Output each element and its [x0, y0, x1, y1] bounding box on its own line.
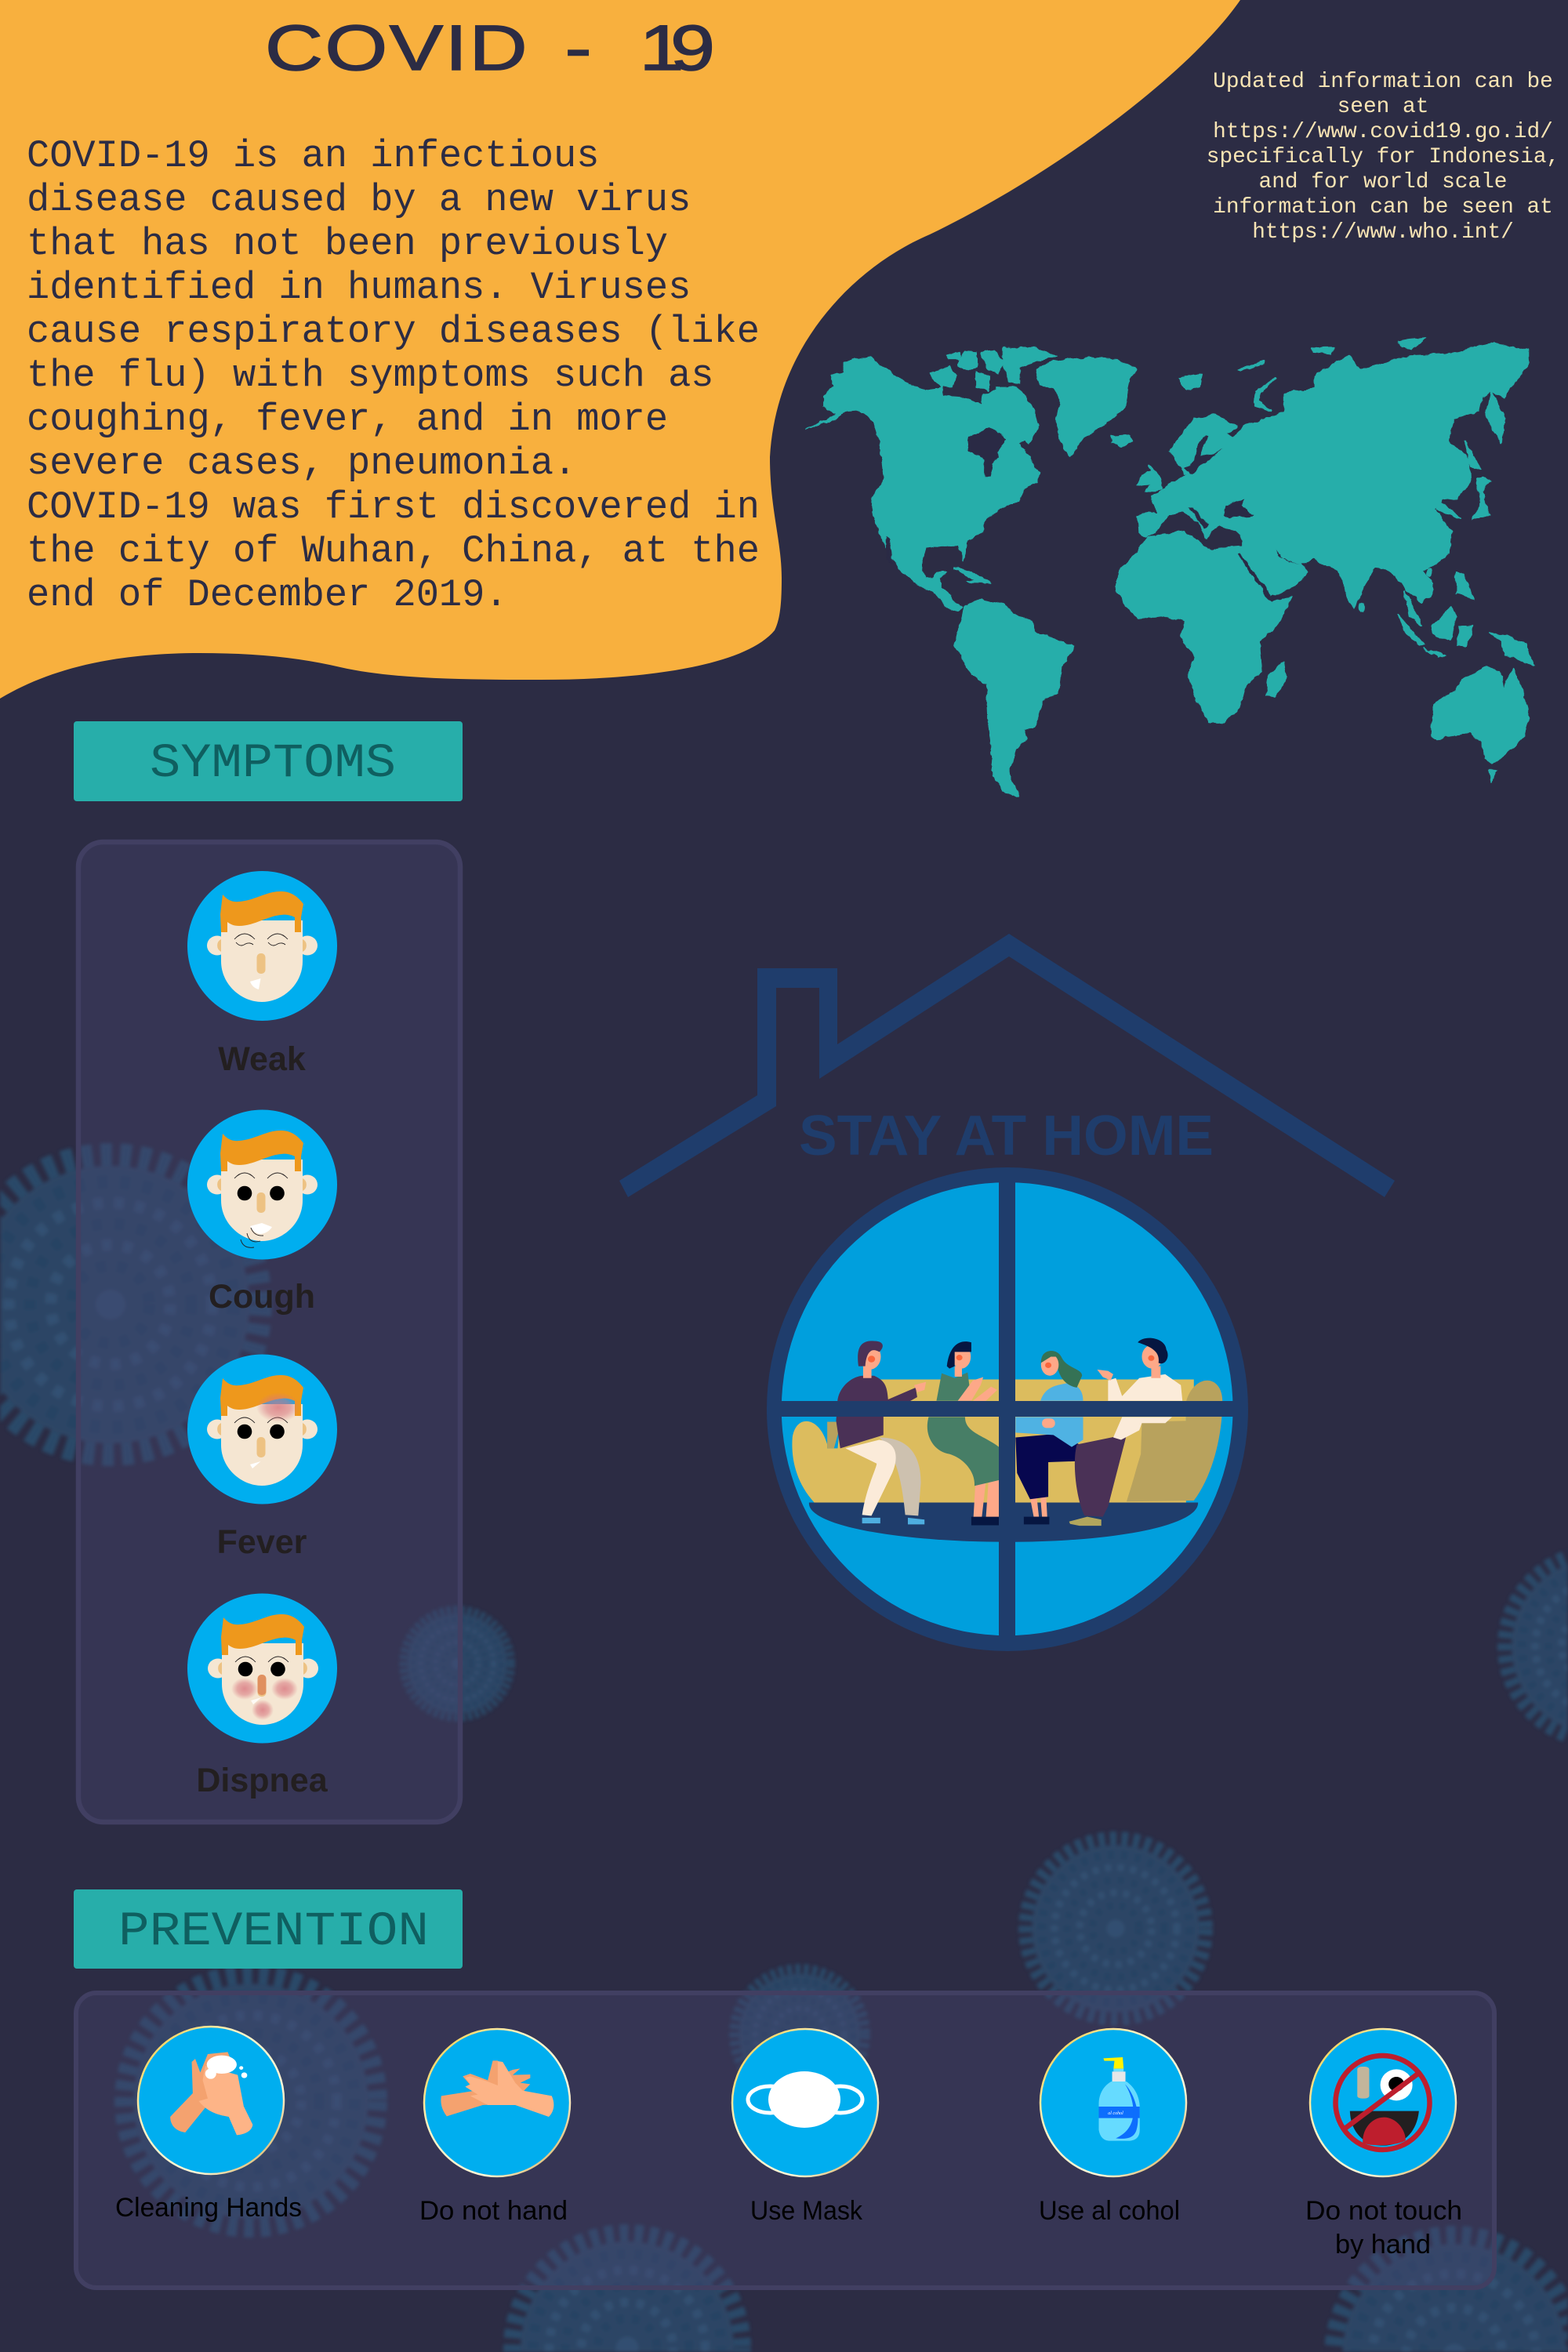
intro text block: COVID-19 was first discovered in — [27, 485, 760, 529]
panel: symptoms — [78, 842, 460, 1822]
stay at home heading: STAY AT HOME — [799, 1105, 1214, 1167]
person: woman in blue — [1015, 1351, 1083, 1524]
prevention: use alcohol: Use al cohol — [1039, 2196, 1180, 2226]
prevention: do not touch: by hand — [1335, 2230, 1431, 2259]
intro text block: the city of Wuhan, China, at the — [27, 529, 760, 573]
prevention: use alcohol: al cohol — [1108, 2111, 1123, 2116]
symptom: fever: Fever — [217, 1523, 307, 1561]
symptom: cough: Cough — [209, 1278, 315, 1316]
prevention: use alcohol — [1039, 2029, 1186, 2226]
world map — [807, 338, 1534, 797]
symptom: weak: Weak — [218, 1040, 306, 1078]
intro text block: that has not been previously — [27, 222, 668, 266]
person: woman in green dress — [927, 1341, 999, 1526]
window cross bars — [772, 1172, 1243, 1646]
panel: prevention — [76, 1993, 1494, 2288]
stay at home illustration — [619, 934, 1395, 1651]
updated information note: https://www.covid19.go.id/ — [1213, 120, 1553, 144]
prevention: do not hand — [419, 2029, 570, 2226]
intro text block: coughing, fever, and in more — [27, 397, 668, 441]
intro text block: identified in humans. Viruses — [27, 266, 691, 310]
intro text block: end of December 2019. — [27, 573, 508, 617]
intro text block: disease caused by a new virus — [27, 178, 691, 222]
title: COVID — [265, 12, 529, 84]
prevention: use mask — [732, 2029, 878, 2226]
symptoms heading — [74, 721, 463, 801]
updated information note: seen at — [1338, 95, 1428, 119]
window frame — [767, 1167, 1248, 1651]
symptom: dispnea — [187, 1593, 337, 1799]
background virus particles — [0, 1136, 1568, 2352]
prevention: do not hand: Do not hand — [419, 2196, 568, 2226]
intro text block: cause respiratory diseases (like — [27, 310, 760, 354]
icon: house roof — [619, 934, 1395, 1197]
floor — [809, 1502, 1198, 1542]
symptom: dispnea: Dispnea — [196, 1762, 328, 1799]
updated information note: Updated information can be — [1213, 70, 1553, 94]
prevention: cleaning hands: Cleaning Hands — [115, 2193, 302, 2223]
symptom: cough — [187, 1110, 337, 1316]
symptom: fever — [187, 1355, 337, 1561]
title: - — [564, 12, 593, 84]
updated information note: and for world scale — [1259, 170, 1507, 194]
intro text block: COVID-19 is an infectious — [27, 134, 599, 178]
intro text block: the flu) with symptoms such as — [27, 354, 714, 397]
prevention: use mask: Use Mask — [750, 2196, 863, 2226]
prevention: do not touch — [1305, 2029, 1462, 2259]
prevention heading: PREVENTION — [118, 1905, 429, 1959]
person: man in white — [1069, 1338, 1182, 1526]
family on sofa scene — [773, 1174, 1240, 1644]
symptom: weak — [187, 871, 337, 1078]
intro text block: severe cases, pneumonia. — [27, 441, 576, 485]
prevention: cleaning hands — [115, 2027, 302, 2223]
symptoms heading: SYMPTOMS — [150, 737, 396, 791]
prevention: do not touch: Do not touch — [1305, 2196, 1462, 2226]
updated information note: information can be seen at — [1213, 195, 1553, 220]
updated information note: https://www.who.int/ — [1252, 220, 1514, 245]
title: 19 — [640, 12, 712, 84]
updated information note: specifically for Indonesia, — [1207, 145, 1559, 169]
sofa — [792, 1380, 1194, 1502]
person: man in purple — [836, 1341, 926, 1524]
orange header blob — [0, 0, 1240, 699]
prevention heading — [74, 1889, 463, 1969]
